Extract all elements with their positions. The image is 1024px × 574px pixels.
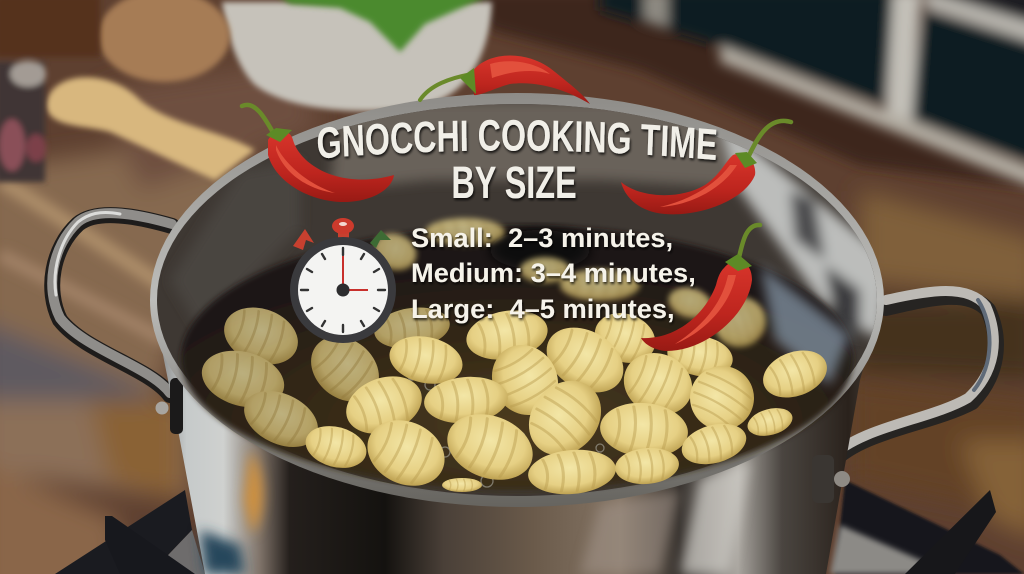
pot inner wall bbox=[150, 90, 890, 510]
pot body bbox=[152, 300, 883, 574]
small time: Small: 2–3 minutes, bbox=[411, 222, 673, 253]
gnocchi: front, in focus bbox=[301, 304, 834, 498]
pot handle: right bbox=[822, 291, 996, 502]
title line 2: BY SIZE bbox=[451, 159, 577, 208]
pot rim bbox=[150, 93, 884, 507]
chili: left bbox=[242, 105, 394, 202]
background: onion bbox=[98, 0, 230, 82]
title bbox=[318, 120, 719, 208]
stove grates bbox=[55, 480, 1024, 574]
icon: stopwatch bbox=[290, 218, 396, 343]
right handle rivet bbox=[812, 455, 850, 503]
background: wooden spoon bbox=[46, 77, 255, 180]
cooking times list bbox=[411, 222, 696, 324]
medium time: Medium: 3–4 minutes, bbox=[411, 257, 696, 288]
left handle rivet bbox=[156, 378, 183, 434]
gnocchi: blurred, back of the pot bbox=[368, 218, 773, 354]
boiling water bbox=[181, 226, 853, 490]
pot handle: left bbox=[52, 212, 172, 395]
background: dark items top left bbox=[0, 0, 100, 182]
background: dark tiled wall bbox=[470, 0, 1024, 190]
chili: right bbox=[621, 121, 791, 214]
background: white bowl with greens bbox=[222, 0, 495, 111]
chili: top bbox=[420, 56, 590, 104]
title line 1: GNOCCHI COOKING TIME bbox=[318, 120, 719, 164]
gnocchi: dim, under the water bbox=[195, 298, 452, 458]
large time: Large: 4–5 minutes, bbox=[411, 293, 675, 324]
chili: lower right bbox=[641, 225, 760, 351]
